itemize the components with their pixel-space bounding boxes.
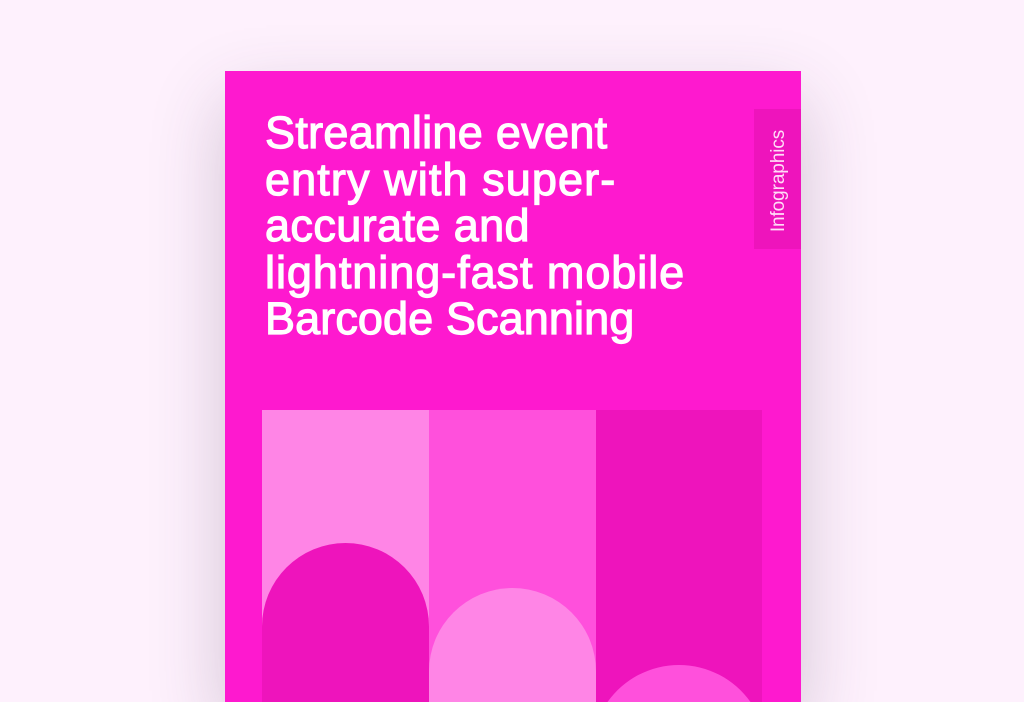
title: Barcode Scanning xyxy=(265,293,634,344)
panel: poster card xyxy=(225,71,801,702)
title: accurate and xyxy=(265,200,530,251)
title: entry with super- xyxy=(265,154,616,205)
tab: Infographics label: Infographics xyxy=(768,130,788,232)
title: Streamline event xyxy=(265,107,607,158)
column 3 with mid arch xyxy=(596,410,762,702)
column 1 with dark arch xyxy=(262,410,429,702)
column 2 with light arch xyxy=(429,410,596,702)
title xyxy=(265,107,685,344)
tab: Infographics label xyxy=(754,109,801,249)
panel: three-column arch graphic xyxy=(262,410,762,702)
title: lightning-fast mobile xyxy=(265,247,685,298)
